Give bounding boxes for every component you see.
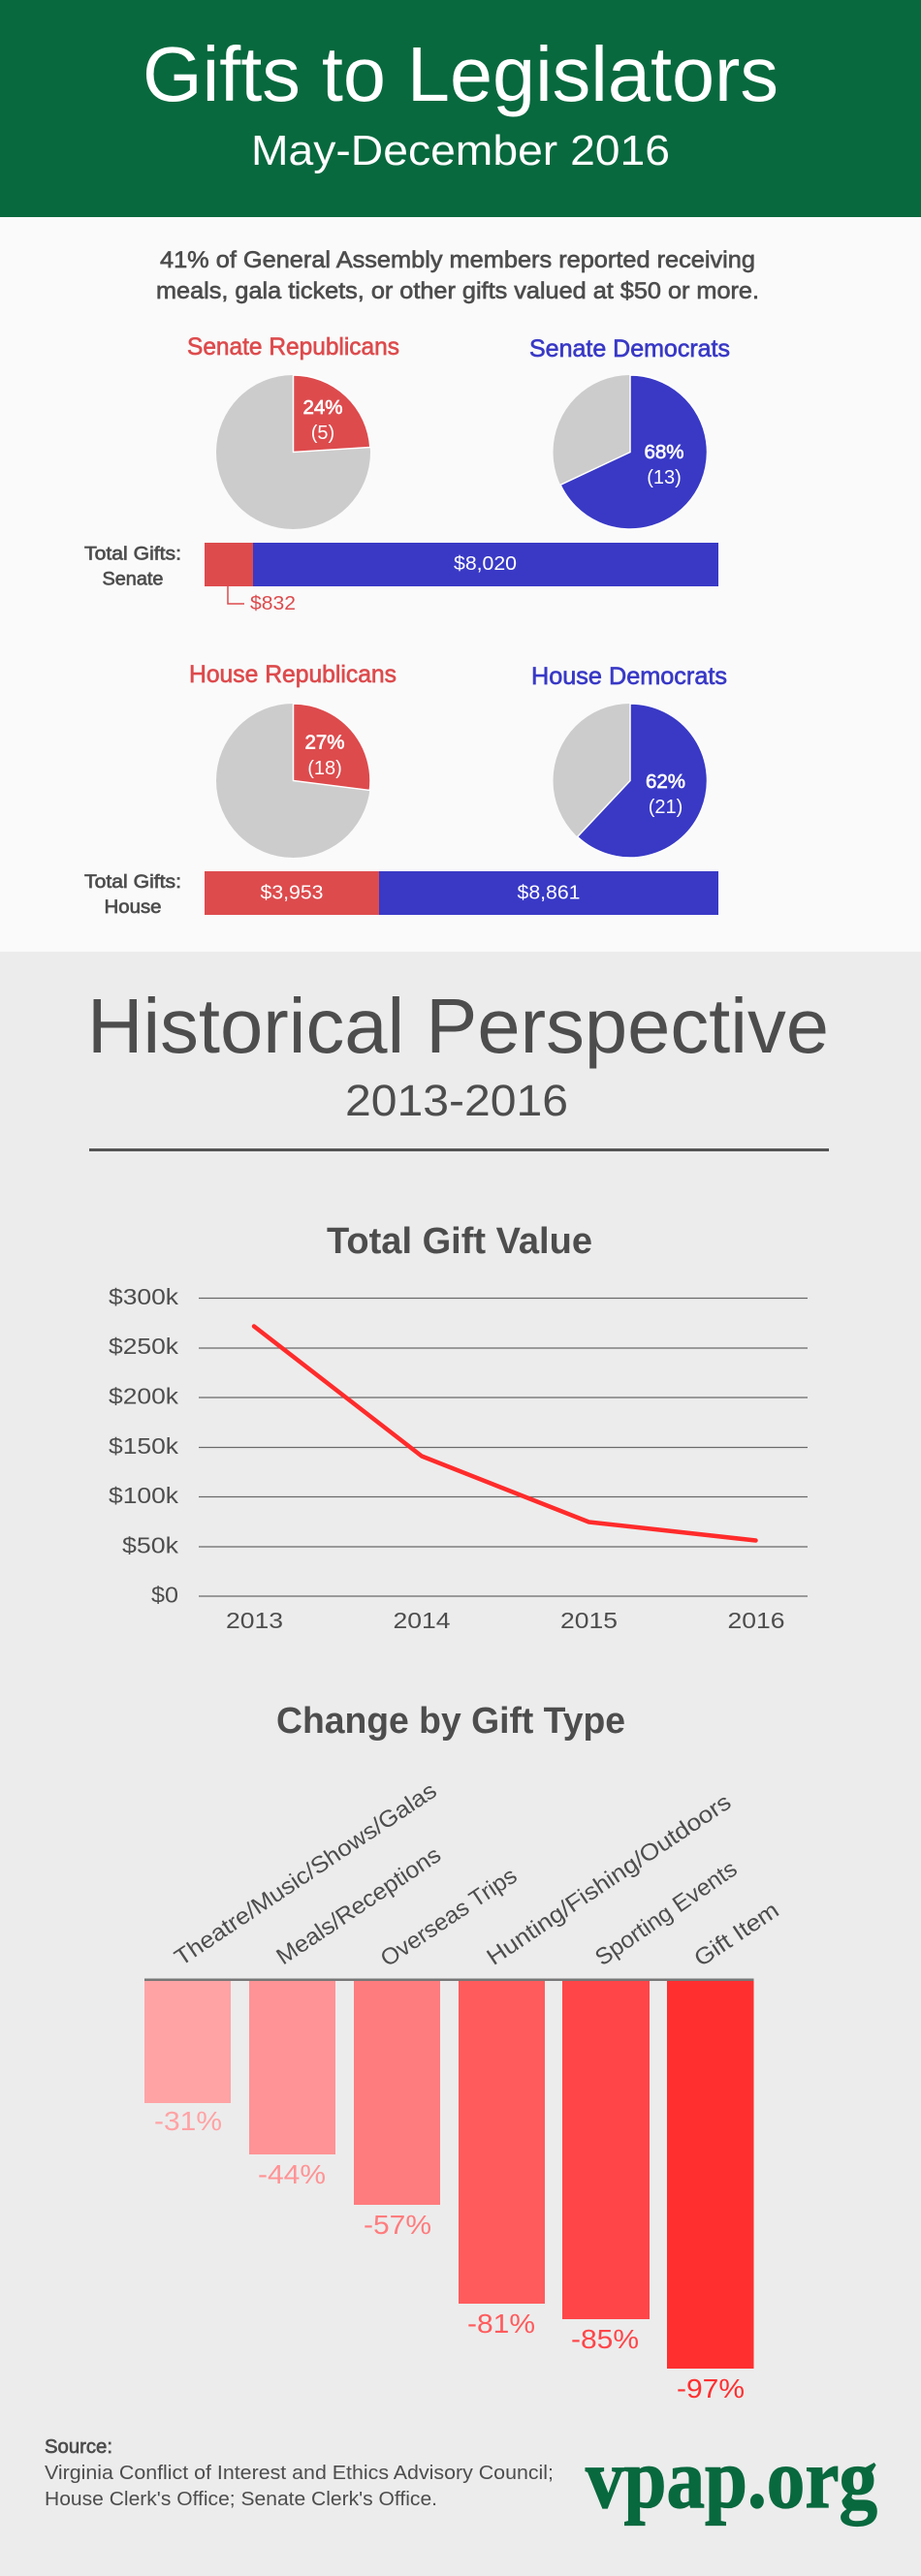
pie: Senate Republicans 24%: 24% [302, 397, 343, 419]
stacked bar: senate total gifts: $8,020 [454, 553, 517, 575]
stacked bar: senate total gifts [205, 543, 718, 586]
line chart: total gift value: 2014 [394, 1608, 451, 1633]
rotated category labels: Theatre/Music/Shows/Galas [170, 1777, 441, 1971]
pie: House Democrats 62%: 62% [646, 771, 685, 793]
label: total gifts senate: Total Gifts: [84, 545, 181, 564]
line chart: total gift value: $100k [109, 1483, 179, 1508]
stacked bar: house total gifts: $8,861 [518, 882, 580, 903]
label: total gifts house: House [105, 897, 161, 918]
value labels: -81% [467, 2309, 535, 2339]
line chart: total gift value: $50k [122, 1533, 179, 1558]
panel: header [0, 0, 921, 217]
rotated category labels: Overseas Trips [376, 1863, 522, 1972]
pie: House Democrats 62% [553, 704, 708, 858]
label: total gifts senate: Senate [103, 570, 163, 589]
heading: House Democrats: House Democrats [531, 663, 727, 690]
value labels: -85% [571, 2324, 639, 2354]
panel: 2016 gifts by chamber and party [0, 217, 921, 952]
source note: House Clerk's Office; Senate Clerk's Office. [45, 2489, 437, 2510]
rotated category labels: Meals/Receptions [271, 1841, 446, 1970]
heading: Senate Democrats: Senate Democrats [529, 335, 730, 362]
value labels [154, 2106, 745, 2403]
stacked bar: house total gifts [205, 871, 718, 915]
callout: $832: $832 [250, 593, 296, 614]
label: total gifts house [84, 872, 181, 918]
pie: Senate Democrats 68%: (13) [647, 467, 682, 488]
line chart: total gift value: 2015 [560, 1608, 618, 1633]
intro text: meals, gala tickets, or other gifts valued at $50 or more. [156, 278, 759, 304]
rotated category labels: Gift Item [689, 1897, 784, 1972]
subtitle: May-December 2016 [251, 127, 670, 174]
value labels: -44% [258, 2159, 326, 2189]
pie: Senate Republicans 24% [216, 375, 370, 529]
panel: historical perspective [0, 952, 921, 2576]
label: total gifts house: Total Gifts: [84, 872, 181, 893]
pie: Senate Republicans 24%: (5) [311, 423, 334, 444]
rotated category labels [170, 1777, 784, 1972]
intro text: 41% of General Assembly members reported receiving [160, 247, 755, 273]
line chart: total gift value: $300k [109, 1284, 179, 1309]
bar chart: change by gift type [144, 1777, 784, 2403]
line chart: total gift value: $200k [109, 1384, 179, 1409]
line chart: total gift value: 2016 [727, 1608, 785, 1633]
source note: Virginia Conflict of Interest and Ethics Advisory Council; [45, 2463, 554, 2484]
stacked bar: house total gifts: $3,953 [260, 882, 324, 903]
subheading: years: 2013-2016 [345, 1076, 568, 1125]
source note: Source: [45, 2436, 112, 2458]
heading: Change by Gift Type: Change by Gift Type [276, 1701, 625, 1742]
value labels: -97% [677, 2373, 745, 2403]
axis line [144, 1979, 754, 1981]
label: total gifts senate [84, 545, 181, 589]
line chart: total gift value: $250k [109, 1334, 179, 1359]
heading: Senate Republicans: Senate Republicans [187, 333, 399, 361]
value labels: -57% [364, 2210, 431, 2240]
title: Gifts to Legislators [143, 31, 778, 117]
line chart: total gift value: $0 [151, 1582, 178, 1607]
pie: Senate Democrats 68%: 68% [644, 442, 684, 463]
pie: House Republicans 27%: 27% [304, 733, 345, 754]
line chart: total gift value [109, 1284, 808, 1633]
source note [45, 2436, 554, 2510]
pie: Senate Democrats 68% [553, 375, 708, 529]
divider rule [89, 1148, 829, 1151]
value labels: -31% [154, 2106, 222, 2136]
heading: Total Gift Value: Total Gift Value [327, 1221, 592, 1262]
heading: House Republicans: House Republicans [189, 661, 397, 688]
line chart: total gift value: $150k [109, 1433, 179, 1459]
logo: vpap.org: vpap.org [586, 2433, 877, 2527]
line chart: total gift value: 2013 [226, 1608, 283, 1633]
intro text [156, 247, 759, 304]
heading: Historical Perspective: Historical Perspective [87, 983, 829, 1069]
bars [144, 1979, 754, 2369]
rotated category labels: Sporting Events [590, 1856, 742, 1971]
pie: House Republicans 27% [216, 704, 370, 858]
rotated category labels: Hunting/Fishing/Outdoors [482, 1789, 736, 1970]
pie: House Republicans 27%: (18) [307, 758, 342, 779]
callout: $832 [228, 586, 296, 614]
pie: House Democrats 62%: (21) [649, 797, 683, 818]
